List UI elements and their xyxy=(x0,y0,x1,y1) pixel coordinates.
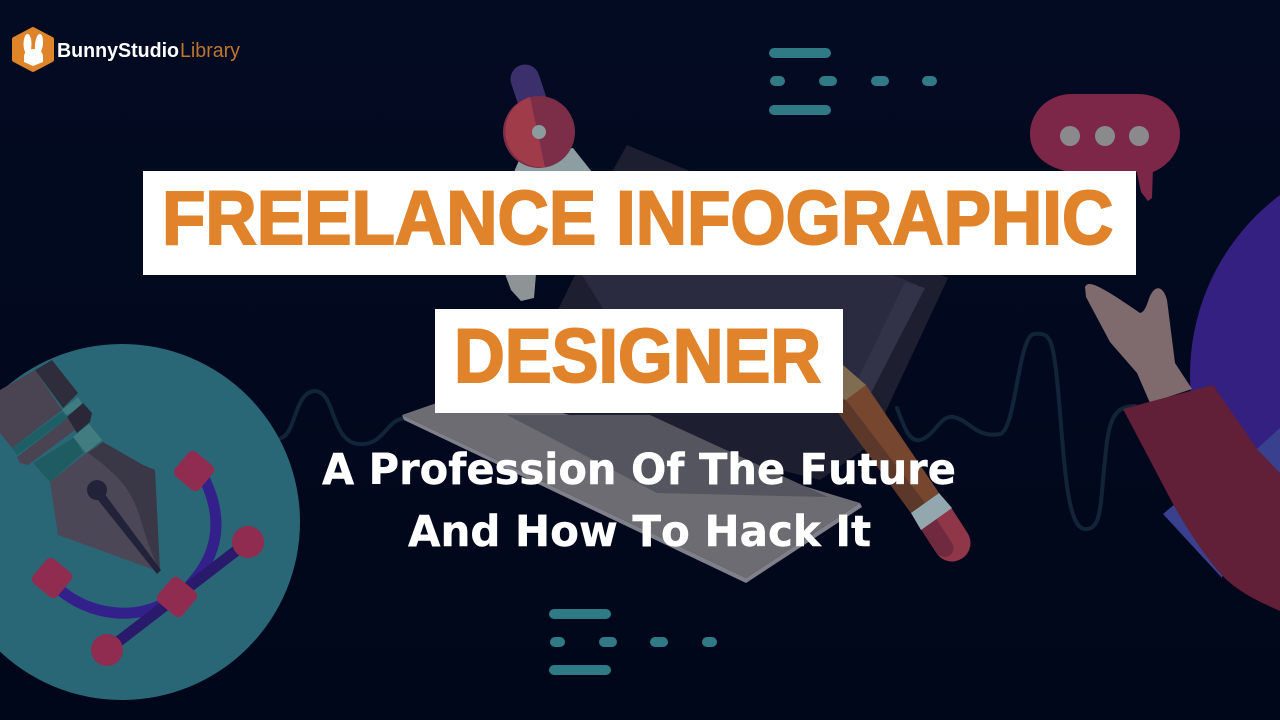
icon: pen tool circle xyxy=(0,344,300,700)
compass handle xyxy=(525,79,536,112)
illustration: laptop xyxy=(402,145,948,583)
bezier curves xyxy=(60,480,245,648)
wave line decoration xyxy=(281,334,1135,529)
decorative dashes: bottom xyxy=(549,609,717,675)
title line 1: FREELANCE INFOGRAPHIC xyxy=(162,175,1113,261)
laptop front edge xyxy=(402,415,862,583)
decorative dashes: top xyxy=(769,48,937,115)
logo wordmark: BunnyStudio xyxy=(57,39,179,62)
subtitle: A Profession Of The Future xyxy=(322,445,956,494)
nib slit xyxy=(87,480,161,574)
compass hinge xyxy=(503,96,575,168)
blue shirt xyxy=(1163,504,1225,578)
red sleeve xyxy=(1123,385,1280,611)
logo wordmark: Library xyxy=(180,39,241,62)
title line 2: DESIGNER xyxy=(454,313,821,399)
icon: speech bubble xyxy=(1030,94,1180,201)
bezier anchor points xyxy=(29,448,264,666)
pen collar xyxy=(33,437,83,482)
illustration: person with raised hand xyxy=(1085,150,1280,611)
subtitle xyxy=(322,445,956,556)
icon: pencil xyxy=(830,365,952,548)
laptop base xyxy=(402,388,860,578)
logo xyxy=(14,29,241,70)
hand xyxy=(1085,284,1192,403)
laptop screen xyxy=(500,145,948,480)
pen barrel xyxy=(0,360,92,465)
pen nib xyxy=(50,442,160,572)
subtitle: And How To Hack It xyxy=(408,507,871,556)
compass legs xyxy=(514,148,592,172)
purple circle xyxy=(1190,150,1280,600)
icon: compass xyxy=(503,79,592,301)
icon: bunny hexagon xyxy=(14,29,52,70)
laptop keyboard xyxy=(507,415,828,497)
